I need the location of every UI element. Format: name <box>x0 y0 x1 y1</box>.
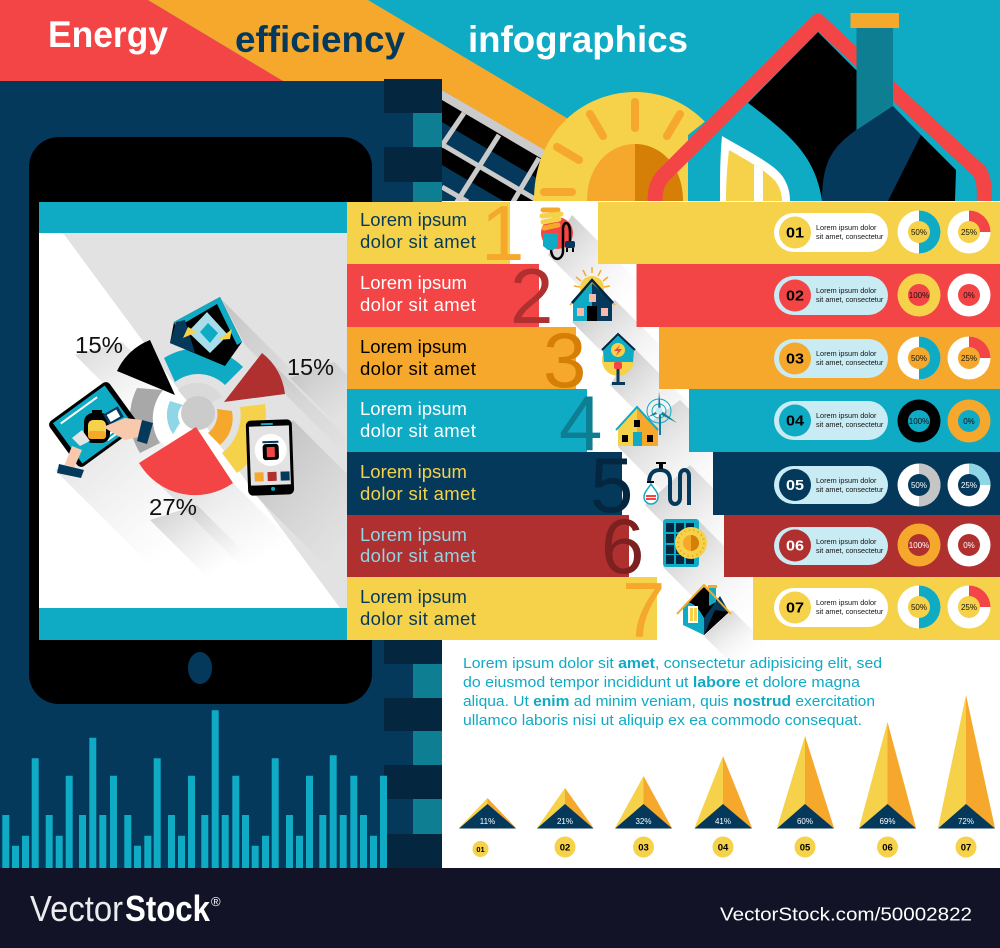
donut 50%: 50% <box>911 354 927 363</box>
long shadows in the chart <box>55 300 347 564</box>
badge 07 <box>956 836 976 858</box>
heading row 5: Lorem ipsum <box>360 461 467 482</box>
row headings <box>360 209 476 629</box>
donut 25%: 25% <box>961 603 977 612</box>
pill 02 <box>774 276 888 315</box>
segment: pale grey inner <box>178 383 222 403</box>
body paragraph: Lorem ipsum dolor sit amet, consectetur adipisicing elit, sed <box>463 655 882 672</box>
pyramid 03: 32% <box>615 776 672 828</box>
footer logo: Stock <box>125 888 211 929</box>
pyramid 02: 21%: 21% <box>557 817 573 826</box>
badge 02: 02 <box>560 842 570 854</box>
pyramid number badges <box>472 836 976 858</box>
icon: smart home plug <box>602 334 635 385</box>
donut 50%: 50% <box>911 228 927 237</box>
segment: red 27% <box>139 427 233 495</box>
donut 100%: 100% <box>909 417 929 426</box>
chimney cap <box>850 13 899 28</box>
row 1 band <box>347 202 1000 264</box>
pill 03 <box>774 339 888 378</box>
heading row 6: dolor sit amet <box>360 545 476 566</box>
footer logo: ® <box>211 894 221 909</box>
row 6 band <box>347 515 1000 577</box>
heading row 7: Lorem ipsum <box>360 586 467 607</box>
pill 01: 01 <box>786 224 804 242</box>
row 6 right side: pill and donuts <box>774 524 990 566</box>
title word: efficiency: efficiency <box>235 19 405 60</box>
row 5 band <box>347 452 1000 515</box>
heading row 2: dolor sit amet <box>360 294 476 315</box>
donut 0%: 0% <box>963 291 975 300</box>
donut 100% <box>898 400 940 442</box>
large numerals <box>481 189 665 654</box>
pill 04: Lorem ipsum dolor <box>816 411 877 420</box>
pill 03: Lorem ipsum dolor <box>816 349 877 358</box>
row 3 right side: pill and donuts <box>774 336 990 380</box>
pyramid 06: 69% <box>859 722 916 828</box>
donut 25%: 25% <box>961 354 977 363</box>
badge 02 <box>554 836 576 858</box>
segment: grey outer <box>130 388 163 453</box>
heading row 6: Lorem ipsum <box>360 524 467 545</box>
solar panel illustration <box>442 90 544 201</box>
yellow leaf <box>720 136 790 201</box>
pyramid 02: 21% <box>537 788 594 828</box>
row 7 right side: pill and donuts <box>774 586 990 628</box>
skyline bar chart <box>2 710 387 868</box>
pill 01 <box>774 213 888 252</box>
numeral 4: 4 <box>559 379 602 467</box>
title word: Energy: Energy <box>48 14 168 55</box>
icon: house with roof and chimney <box>677 585 731 635</box>
numeral 7: 7 <box>622 566 665 654</box>
numeral 3: 3 <box>543 316 586 404</box>
donut 25%: 25% <box>961 228 977 237</box>
pyramid 05: 60% <box>777 736 834 828</box>
black roof interior <box>748 32 956 201</box>
donut 100% <box>898 524 940 566</box>
segment: yellow <box>222 404 266 473</box>
pill 05 <box>774 466 888 504</box>
body paragraph: ullamco laboris nisi ut aliquip ex ea commodo consequat. <box>463 712 862 729</box>
brick column <box>384 79 442 868</box>
pill 06: sit amet, consectetur <box>816 546 884 555</box>
badge 01 <box>472 841 488 857</box>
pill 06 <box>774 527 888 565</box>
pill 05: 05 <box>786 477 804 494</box>
donut 0%: 0% <box>963 417 975 426</box>
segment: orange inner <box>208 409 233 445</box>
pyramid 07: 72%: 72% <box>958 817 974 826</box>
row 4 right side: pill and donuts <box>774 400 990 442</box>
heading row 1: Lorem ipsum <box>360 209 467 230</box>
icon: light bulb and plug <box>541 210 575 259</box>
pill 05: sit amet, consectetur <box>816 485 884 494</box>
pill 03: 03 <box>786 350 804 368</box>
heading row 3: dolor sit amet <box>360 358 476 379</box>
donut 25% <box>948 464 990 506</box>
donut 25%: 25% <box>961 481 977 490</box>
segment: brick 15% <box>224 353 285 402</box>
pill 04: 04 <box>786 412 805 430</box>
heading row 2: Lorem ipsum <box>360 272 467 293</box>
tablet home button <box>188 652 212 684</box>
title <box>48 14 688 60</box>
segment: teal <box>164 348 243 385</box>
numeral 5: 5 <box>590 441 633 529</box>
label: 15% right: 15% <box>287 354 334 380</box>
donut 50%: 50% <box>911 481 927 490</box>
badge 03: 03 <box>638 842 649 854</box>
icon: house with wind turbine <box>616 391 677 446</box>
pill 07: Lorem ipsum dolor <box>816 598 877 607</box>
badge 05: 05 <box>800 842 811 854</box>
icon: envelope <box>170 297 242 366</box>
heading row 1: dolor sit amet <box>360 231 476 252</box>
donut 50%: 50% <box>911 603 927 612</box>
pill 02: sit amet, consectetur <box>816 295 884 304</box>
header background: teal <box>0 0 1000 201</box>
donut 50% <box>898 210 940 254</box>
donut 25% <box>948 210 990 254</box>
donut 0% <box>948 274 990 316</box>
footer bar <box>0 868 1000 948</box>
pyramid 07: 72% <box>938 695 995 828</box>
pill 07: 07 <box>786 600 804 616</box>
heading row 7: dolor sit amet <box>360 608 476 629</box>
pyramid 01: 11%: 11% <box>480 817 495 826</box>
tablet screen <box>39 202 347 640</box>
badge 03 <box>633 836 654 858</box>
pyramid 05: 60%: 60% <box>797 817 813 826</box>
teal leaf <box>748 103 822 201</box>
pill 01: Lorem ipsum dolor <box>816 223 877 232</box>
icon: tablet held by hands <box>47 380 153 478</box>
donut 0% <box>948 400 990 442</box>
house illustration <box>655 13 984 201</box>
icon: phone <box>246 419 294 496</box>
footer logo <box>30 888 221 929</box>
body paragraph: do eiusmod tempor incididunt ut labore et dolore magna <box>463 674 861 691</box>
pill 06: 06 <box>786 538 804 554</box>
row 5 right side: pill and donuts <box>774 464 990 506</box>
numeral 1: 1 <box>481 189 524 277</box>
numeral 6: 6 <box>601 502 644 590</box>
numeral 2: 2 <box>510 252 553 340</box>
donut 0%: 0% <box>963 541 975 550</box>
donut 100%: 100% <box>909 541 929 550</box>
badge 04: 04 <box>718 842 729 854</box>
donut 50% <box>898 336 940 380</box>
pyramid 04: 41%: 41% <box>715 817 731 826</box>
footer image id: VectorStock.com/50002822 <box>720 904 972 924</box>
segment: light blue inner <box>167 401 183 434</box>
header band: orange <box>148 0 570 160</box>
footer logo: Vector <box>30 888 123 929</box>
heading row 4: Lorem ipsum <box>360 398 467 419</box>
chimney <box>856 28 893 130</box>
donut 25% <box>948 586 990 628</box>
pill 03: sit amet, consectetur <box>816 358 884 367</box>
badge 05 <box>794 836 816 858</box>
title word: infographics: infographics <box>468 19 688 60</box>
pill 02: Lorem ipsum dolor <box>816 286 877 295</box>
donut 0% <box>948 524 990 566</box>
pyramid chart <box>459 695 995 828</box>
pill 04 <box>774 401 888 440</box>
navy bulb <box>822 106 921 201</box>
row 2 right side: pill and donuts <box>774 274 990 316</box>
donut 100% <box>898 274 940 316</box>
donut 50% <box>898 464 940 506</box>
pill 01: sit amet, consectetur <box>816 232 884 241</box>
pill 02: 02 <box>786 288 804 304</box>
badge 01: 01 <box>476 845 485 854</box>
body paragraph <box>463 655 882 729</box>
badge 04 <box>712 836 734 858</box>
badge 07: 07 <box>961 842 971 854</box>
label: 27%: 27% <box>149 494 197 520</box>
pyramid 04: 41% <box>694 756 752 828</box>
heading row 3: Lorem ipsum <box>360 336 467 357</box>
segment: black 15% <box>117 340 175 395</box>
row 4 band <box>347 389 1000 452</box>
row 2 band <box>347 264 1000 327</box>
icon: house with sun <box>570 267 615 321</box>
body paragraph: aliqua. Ut enim ad minim veniam, quis nostrud exercitation <box>463 693 875 710</box>
icon: water pipe and drop <box>644 462 689 505</box>
row 3 band <box>347 327 1000 389</box>
pyramid 03: 32%: 32% <box>635 817 652 826</box>
badge 06: 06 <box>882 842 893 854</box>
heading row 4: dolor sit amet <box>360 420 476 441</box>
donut 50% <box>898 586 940 628</box>
pill 07: sit amet, consectetur <box>816 607 884 616</box>
chart: radial segments <box>117 340 285 495</box>
pyramid 06: 69%: 69% <box>879 817 896 826</box>
donut 25% <box>948 336 990 380</box>
tablet frame <box>29 137 372 704</box>
badge 06 <box>877 836 898 858</box>
red roof outline <box>655 21 984 201</box>
pill 07 <box>774 588 888 627</box>
pill 06: Lorem ipsum dolor <box>816 537 877 546</box>
centre disc <box>181 396 215 430</box>
left panel background: navy <box>0 80 442 868</box>
row 1 right side: pill and donuts <box>774 210 990 254</box>
header band: red <box>0 0 283 81</box>
pill 05: Lorem ipsum dolor <box>816 476 877 485</box>
pill 04: sit amet, consectetur <box>816 420 884 429</box>
icon long shadows <box>548 215 798 676</box>
label: 15% left: 15% <box>75 332 123 358</box>
heading row 5: dolor sit amet <box>360 483 476 504</box>
pyramid 01: 11% <box>459 798 516 828</box>
sun illustration <box>534 92 708 201</box>
donut 100%: 100% <box>909 291 929 300</box>
icon: solar panel with sun <box>663 519 707 567</box>
row 7 band <box>347 577 1000 640</box>
